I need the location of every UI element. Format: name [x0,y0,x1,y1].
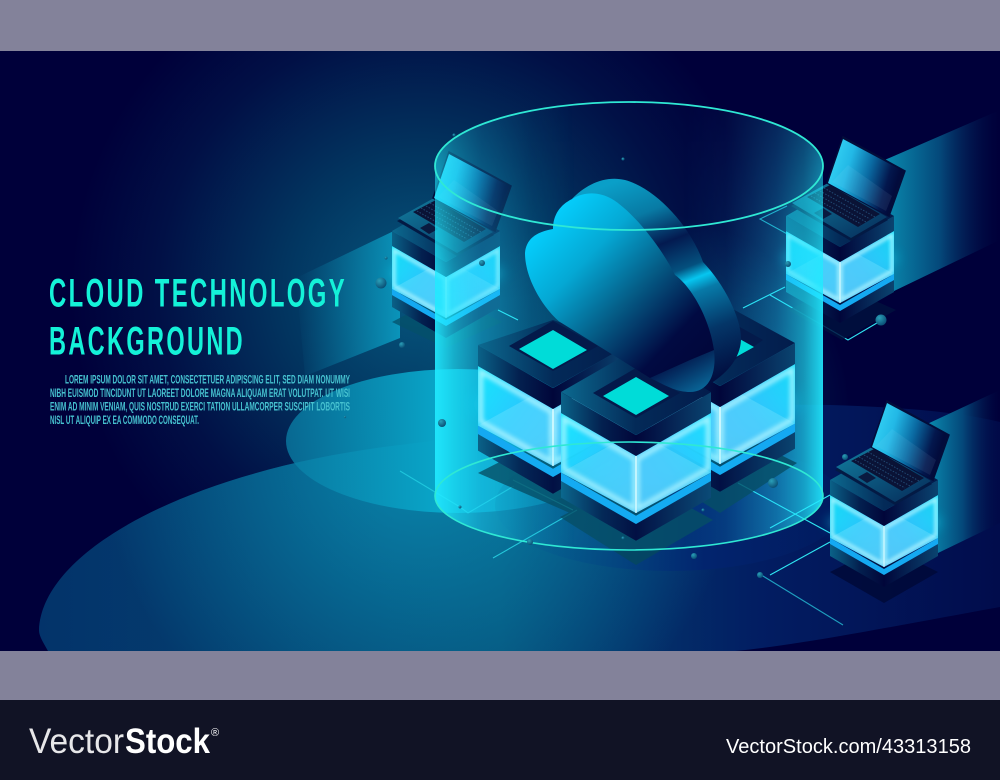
blue floor ellipse [500,484,712,564]
icon: 3D cloud [525,179,741,392]
cube top [713,310,795,386]
server cube: front [553,349,719,541]
footer logo: Vector [29,722,124,761]
shadow: left node [392,306,435,340]
main illustration panel [0,51,1000,651]
recess [509,321,598,371]
cube top [561,360,710,435]
right light beam lower [929,395,990,553]
panel background glow [0,51,1000,651]
radial background light [114,51,721,494]
shadow: bottom right node [830,556,938,603]
top grey band [0,0,1000,51]
body text [50,374,350,427]
footer logo: ® [211,727,219,739]
server cube: back left [470,320,636,494]
body text: NISL UT ALIQUIP EX EA COMMODO CONSEQUAT. [50,415,199,427]
laptop [830,401,949,511]
server node with laptop: top right [780,137,905,323]
server cube: back right [645,310,800,492]
floating particles [344,134,886,578]
cube [780,216,900,323]
footer bar [0,700,1000,780]
bottom grey band [0,651,1000,700]
cylinder top ring [435,102,823,230]
cylinder glass wall [435,102,823,550]
middle floor ellipse [286,369,561,513]
recess [593,368,680,418]
cube [386,231,506,338]
laptop [786,137,905,247]
cube shadows [478,444,797,565]
body text: NIBH EUISMOD TINCIDUNT UT LAOREET DOLORE MAGNA ALIQUAM ERAT VOLUTPAT. UT WISI [50,388,350,400]
footer image id: VectorStock.com/43313158 [726,736,971,758]
body text: ENIM AD MINIM VENIAM, QUIS NOSTRUD EXERCI TATION ULLAMCORPER SUSCIPIT LOBORTIS [50,402,350,414]
cube top [478,320,612,388]
footer logo: Stock [125,722,210,761]
server node with laptop: left [386,152,511,338]
teal pad [603,377,669,415]
large floor ellipse [39,405,1000,651]
teal pad [736,340,754,357]
floor ellipse highlight [144,454,682,651]
laptop [392,152,511,262]
shadow: top right node [792,294,896,340]
footer logo [29,722,219,761]
cube [824,480,944,587]
body text: LOREM IPSUM DOLOR SIT AMET, CONSECTETUER ADIPISCING ELIT, SED DIAM NONUMMY [65,374,350,386]
right light beam upper [886,118,984,291]
circuit lines [400,206,882,625]
title [49,272,347,364]
teal pad [519,330,587,369]
glow inside cylinder [512,245,826,404]
server node with laptop: bottom right [824,401,949,587]
title: BACKGROUND [49,320,245,364]
cylinder bottom ring [435,442,823,550]
recess [736,327,761,359]
left light beam [306,232,400,375]
title: CLOUD TECHNOLOGY [49,272,347,316]
